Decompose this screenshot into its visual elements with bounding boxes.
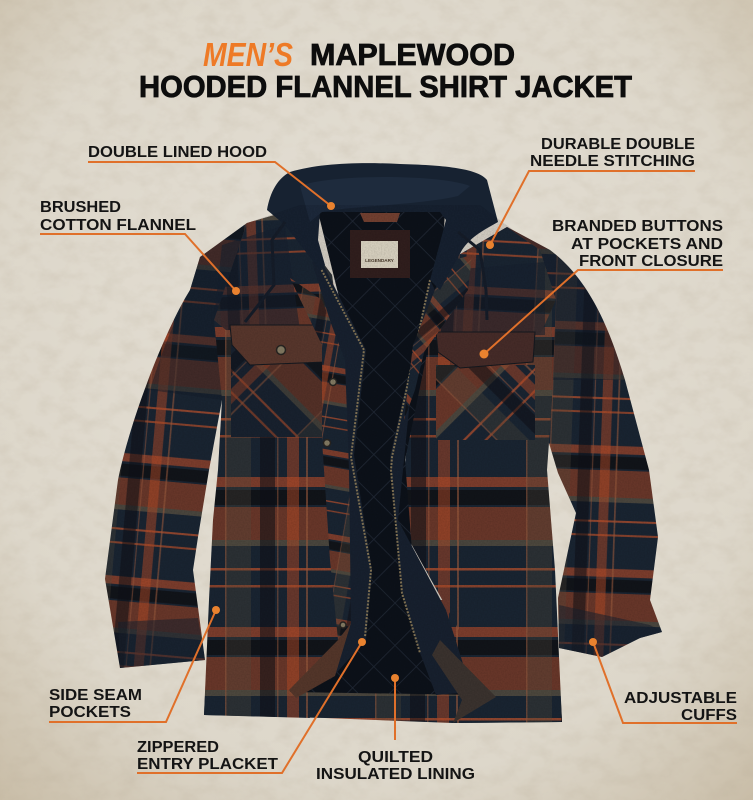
- right front flared edge: [432, 640, 496, 723]
- callout: zippered entry placket: ENTRY PLACKET: [137, 756, 278, 773]
- quilted lining: [290, 212, 480, 695]
- left body panel: [204, 212, 351, 718]
- title accent: men's: MEN’S: [203, 36, 293, 73]
- left sleeve: [105, 223, 260, 668]
- callout: durable double needle stitching: DURABLE DOUBLE: [541, 136, 695, 153]
- callout: branded buttons: AT POCKETS AND: [571, 236, 723, 253]
- callout: side seam pockets: [49, 606, 220, 722]
- right zipper: [391, 280, 430, 653]
- brand label text: LEGENDARY: [365, 258, 394, 263]
- callout: double lined hood: DOUBLE LINED HOOD: [88, 144, 267, 161]
- title line 1: MAPLEWOOD: [310, 38, 515, 72]
- left pocket flap: [230, 325, 325, 365]
- callout: quilted insulated lining: QUILTED: [358, 749, 433, 766]
- fabric grain: [100, 200, 670, 730]
- right pocket flap: [436, 332, 535, 368]
- left chest pocket: [230, 325, 325, 437]
- callout: zippered entry placket: [137, 638, 366, 773]
- callout: branded buttons: [480, 218, 723, 358]
- callout: durable double needle stitching: [486, 136, 695, 249]
- collar tab: [360, 213, 400, 222]
- brand label patch: [350, 230, 410, 278]
- back hem plaid: [204, 600, 562, 723]
- callout: side seam pockets: SIDE SEAM: [49, 687, 142, 704]
- callout: durable double needle stitching: NEEDLE STITCHING: [530, 153, 695, 170]
- title: [139, 36, 632, 104]
- right body panel: [398, 227, 562, 723]
- right collar flap: [404, 255, 472, 420]
- callout: quilted insulated lining: INSULATED LINING: [316, 766, 475, 783]
- callout: adjustable cuffs: [589, 638, 737, 724]
- left yoke: [214, 212, 340, 330]
- callout: quilted insulated lining: [316, 674, 475, 783]
- left zipper facing: [312, 262, 372, 680]
- callout: brushed cotton flannel: [40, 199, 240, 295]
- callout: brushed cotton flannel: COTTON FLANNEL: [40, 217, 196, 234]
- right yoke: [420, 227, 556, 335]
- callout: side seam pockets: POCKETS: [49, 704, 131, 721]
- right chest pocket: [436, 332, 535, 440]
- callout: double lined hood: [88, 144, 335, 210]
- right zipper facing: [390, 280, 472, 695]
- callout: adjustable cuffs: ADJUSTABLE: [624, 690, 737, 707]
- drawcords: [245, 222, 487, 322]
- callout: branded buttons: FRONT CLOSURE: [579, 253, 723, 270]
- hood: [267, 163, 498, 290]
- callout: branded buttons: BRANDED BUTTONS: [552, 218, 723, 235]
- jacket illustration: [100, 163, 670, 730]
- hood inner fold: [300, 177, 470, 222]
- buttons: [276, 346, 346, 628]
- left placket: [290, 278, 351, 640]
- callout: brushed cotton flannel: BRUSHED: [40, 199, 121, 216]
- left zipper: [320, 267, 371, 637]
- right sleeve: [507, 227, 662, 657]
- callout: zippered entry placket: ZIPPERED: [137, 739, 219, 756]
- callout: adjustable cuffs: CUFFS: [681, 707, 737, 724]
- left front flared edge: [289, 623, 351, 698]
- title line 2: HOODED FLANNEL SHIRT JACKET: [139, 70, 632, 104]
